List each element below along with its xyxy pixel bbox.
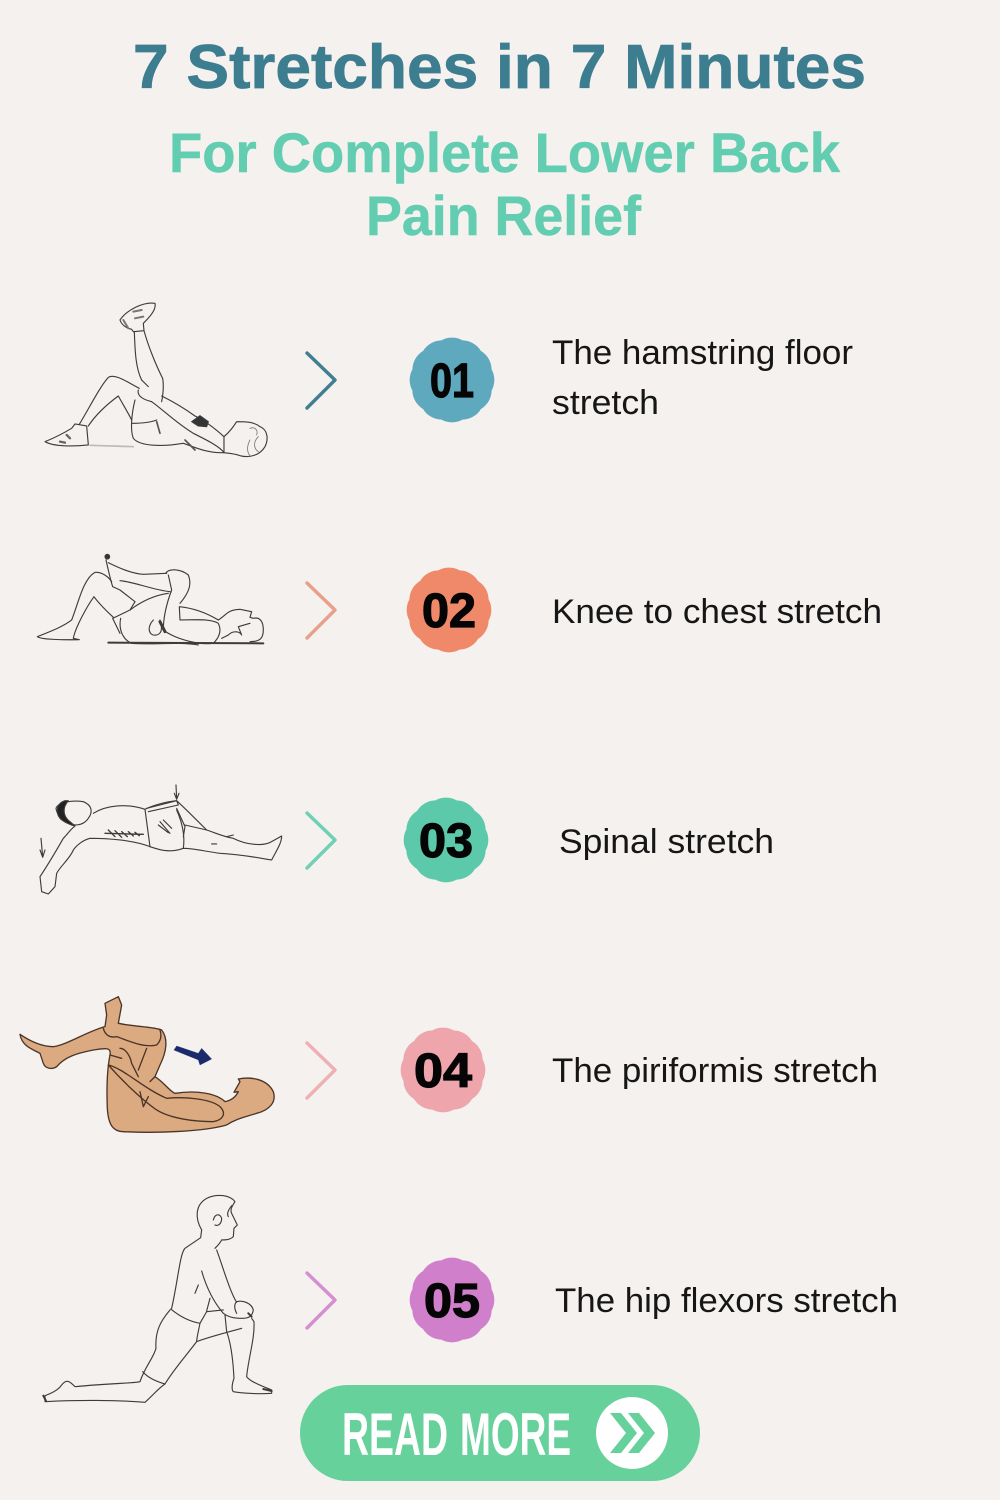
label bbox=[552, 334, 853, 422]
read more button: MORE bbox=[460, 1401, 571, 1468]
illustration: hip flexors stretch bbox=[43, 1195, 272, 1402]
label: The hamstring floor bbox=[552, 334, 853, 372]
arrow bbox=[307, 813, 335, 868]
label: The piriformis stretch bbox=[552, 1052, 878, 1090]
number badge 01: 01 bbox=[430, 355, 474, 408]
arrow: push direction bbox=[174, 1046, 212, 1065]
arrow bbox=[307, 1273, 335, 1328]
subtitle: For Complete Lower Back bbox=[169, 121, 841, 184]
arrow bbox=[307, 583, 335, 638]
number badge 01 bbox=[410, 338, 494, 422]
subtitle: Pain Relief bbox=[366, 184, 641, 247]
number badge 02 bbox=[407, 568, 491, 652]
arrow bbox=[307, 353, 335, 408]
number badge 05: 05 bbox=[424, 1275, 480, 1328]
panel: stretch 03 bbox=[40, 785, 774, 894]
label: stretch bbox=[552, 384, 659, 422]
illustration: knee to chest stretch bbox=[37, 554, 263, 645]
panel: stretch 02 bbox=[37, 554, 882, 652]
number badge 02: 02 bbox=[422, 585, 476, 638]
arrow bbox=[307, 1043, 335, 1098]
label: The hip flexors stretch bbox=[555, 1282, 898, 1320]
panel: stretch 05 bbox=[43, 1195, 898, 1402]
panel: stretch 01 bbox=[45, 303, 853, 457]
number badge 03 bbox=[404, 798, 488, 882]
illustration: spinal stretch bbox=[40, 785, 282, 894]
icon: double chevron bbox=[596, 1397, 668, 1469]
illustration: hamstring floor stretch bbox=[45, 303, 267, 457]
read more button bbox=[300, 1385, 700, 1481]
number badge 04 bbox=[401, 1028, 485, 1112]
illustration: piriformis stretch bbox=[20, 997, 274, 1132]
read more button: READ bbox=[342, 1401, 448, 1468]
subtitle bbox=[169, 121, 841, 247]
label: Knee to chest stretch bbox=[552, 593, 882, 631]
title: 7 Stretches in 7 Minutes bbox=[133, 33, 866, 102]
panel: stretch 04 bbox=[20, 997, 878, 1132]
number badge 04: 04 bbox=[414, 1045, 472, 1098]
number badge 03: 03 bbox=[419, 815, 473, 868]
number badge 05 bbox=[410, 1258, 494, 1342]
label: Spinal stretch bbox=[559, 823, 774, 861]
